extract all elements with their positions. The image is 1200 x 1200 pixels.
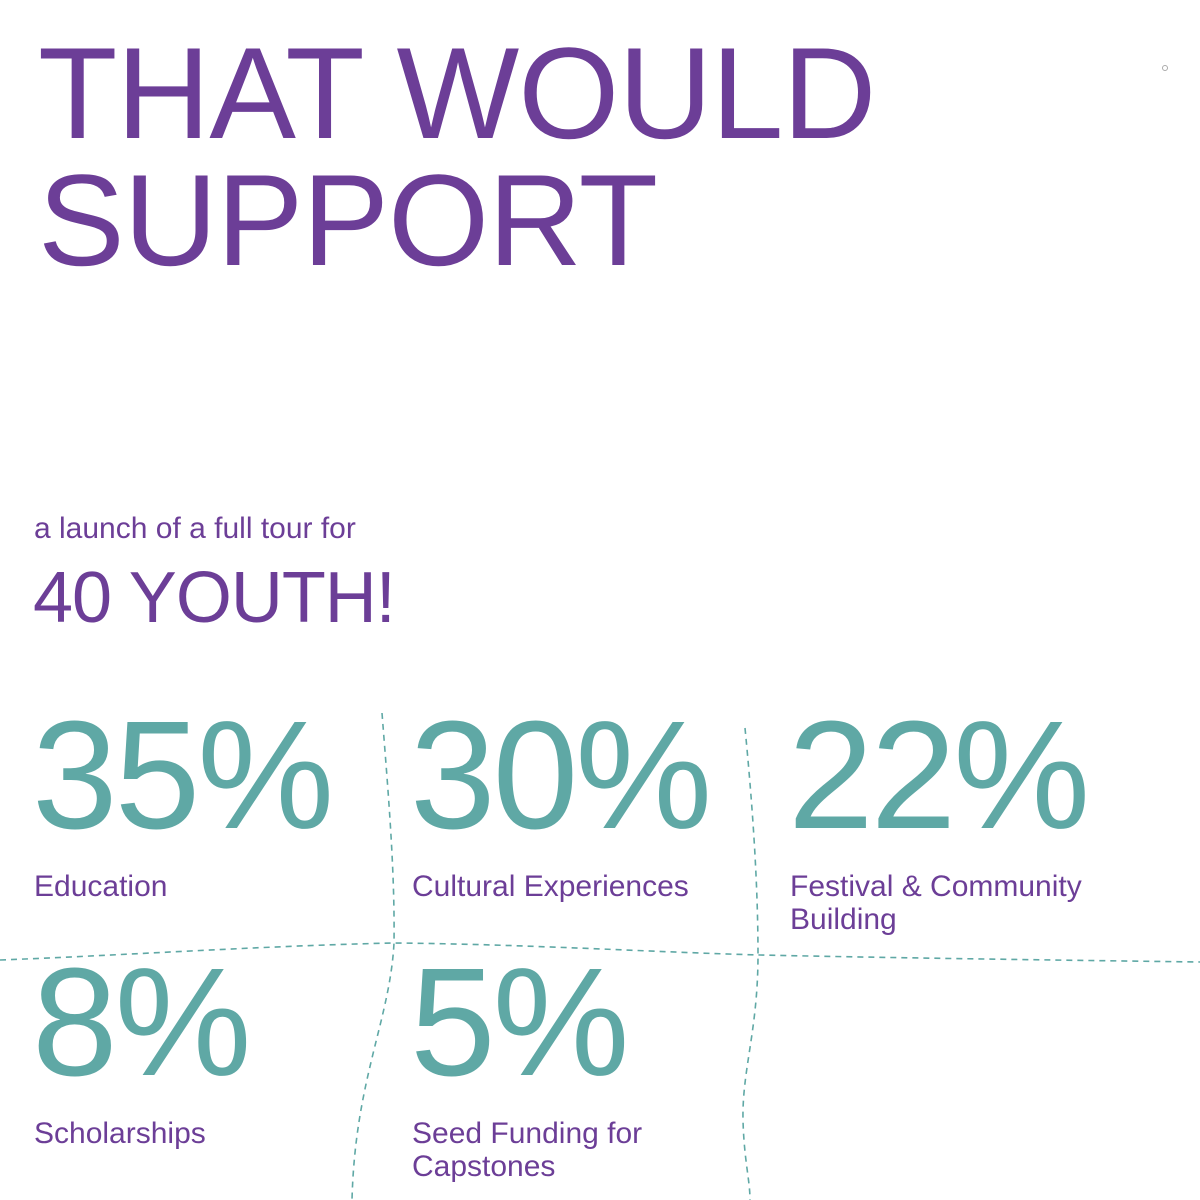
- title: SUPPORT: [38, 147, 657, 293]
- stat: 5% seed funding: [410, 936, 642, 1183]
- stat: 22% festival: Building: [790, 903, 897, 936]
- stat: 35% education: Education: [34, 870, 167, 903]
- stat: 8% scholarships: 8%: [32, 936, 249, 1108]
- headline: 40 youth: 40 YOUTH!: [33, 558, 395, 638]
- subtitle: a launch of a full tour for: [34, 512, 356, 545]
- stat: 5% seed funding: 5%: [410, 936, 627, 1108]
- stat: 22% festival: Festival & Community: [790, 870, 1082, 903]
- title: [38, 20, 875, 293]
- stat: 22% festival: [788, 689, 1087, 936]
- stat: 35% education: 35%: [32, 689, 331, 861]
- stat: 22% festival: 22%: [788, 689, 1087, 861]
- stat: 30% cultural experiences: Cultural Experiences: [412, 870, 689, 903]
- stat: 30% cultural experiences: 30%: [410, 689, 709, 861]
- icon: small circle: [1162, 65, 1168, 71]
- title: THAT WOULD: [38, 20, 875, 166]
- stat: 5% seed funding: Seed Funding for: [412, 1117, 642, 1150]
- stat: 5% seed funding: Capstones: [412, 1150, 555, 1183]
- stat: 8% scholarships: Scholarships: [34, 1117, 206, 1150]
